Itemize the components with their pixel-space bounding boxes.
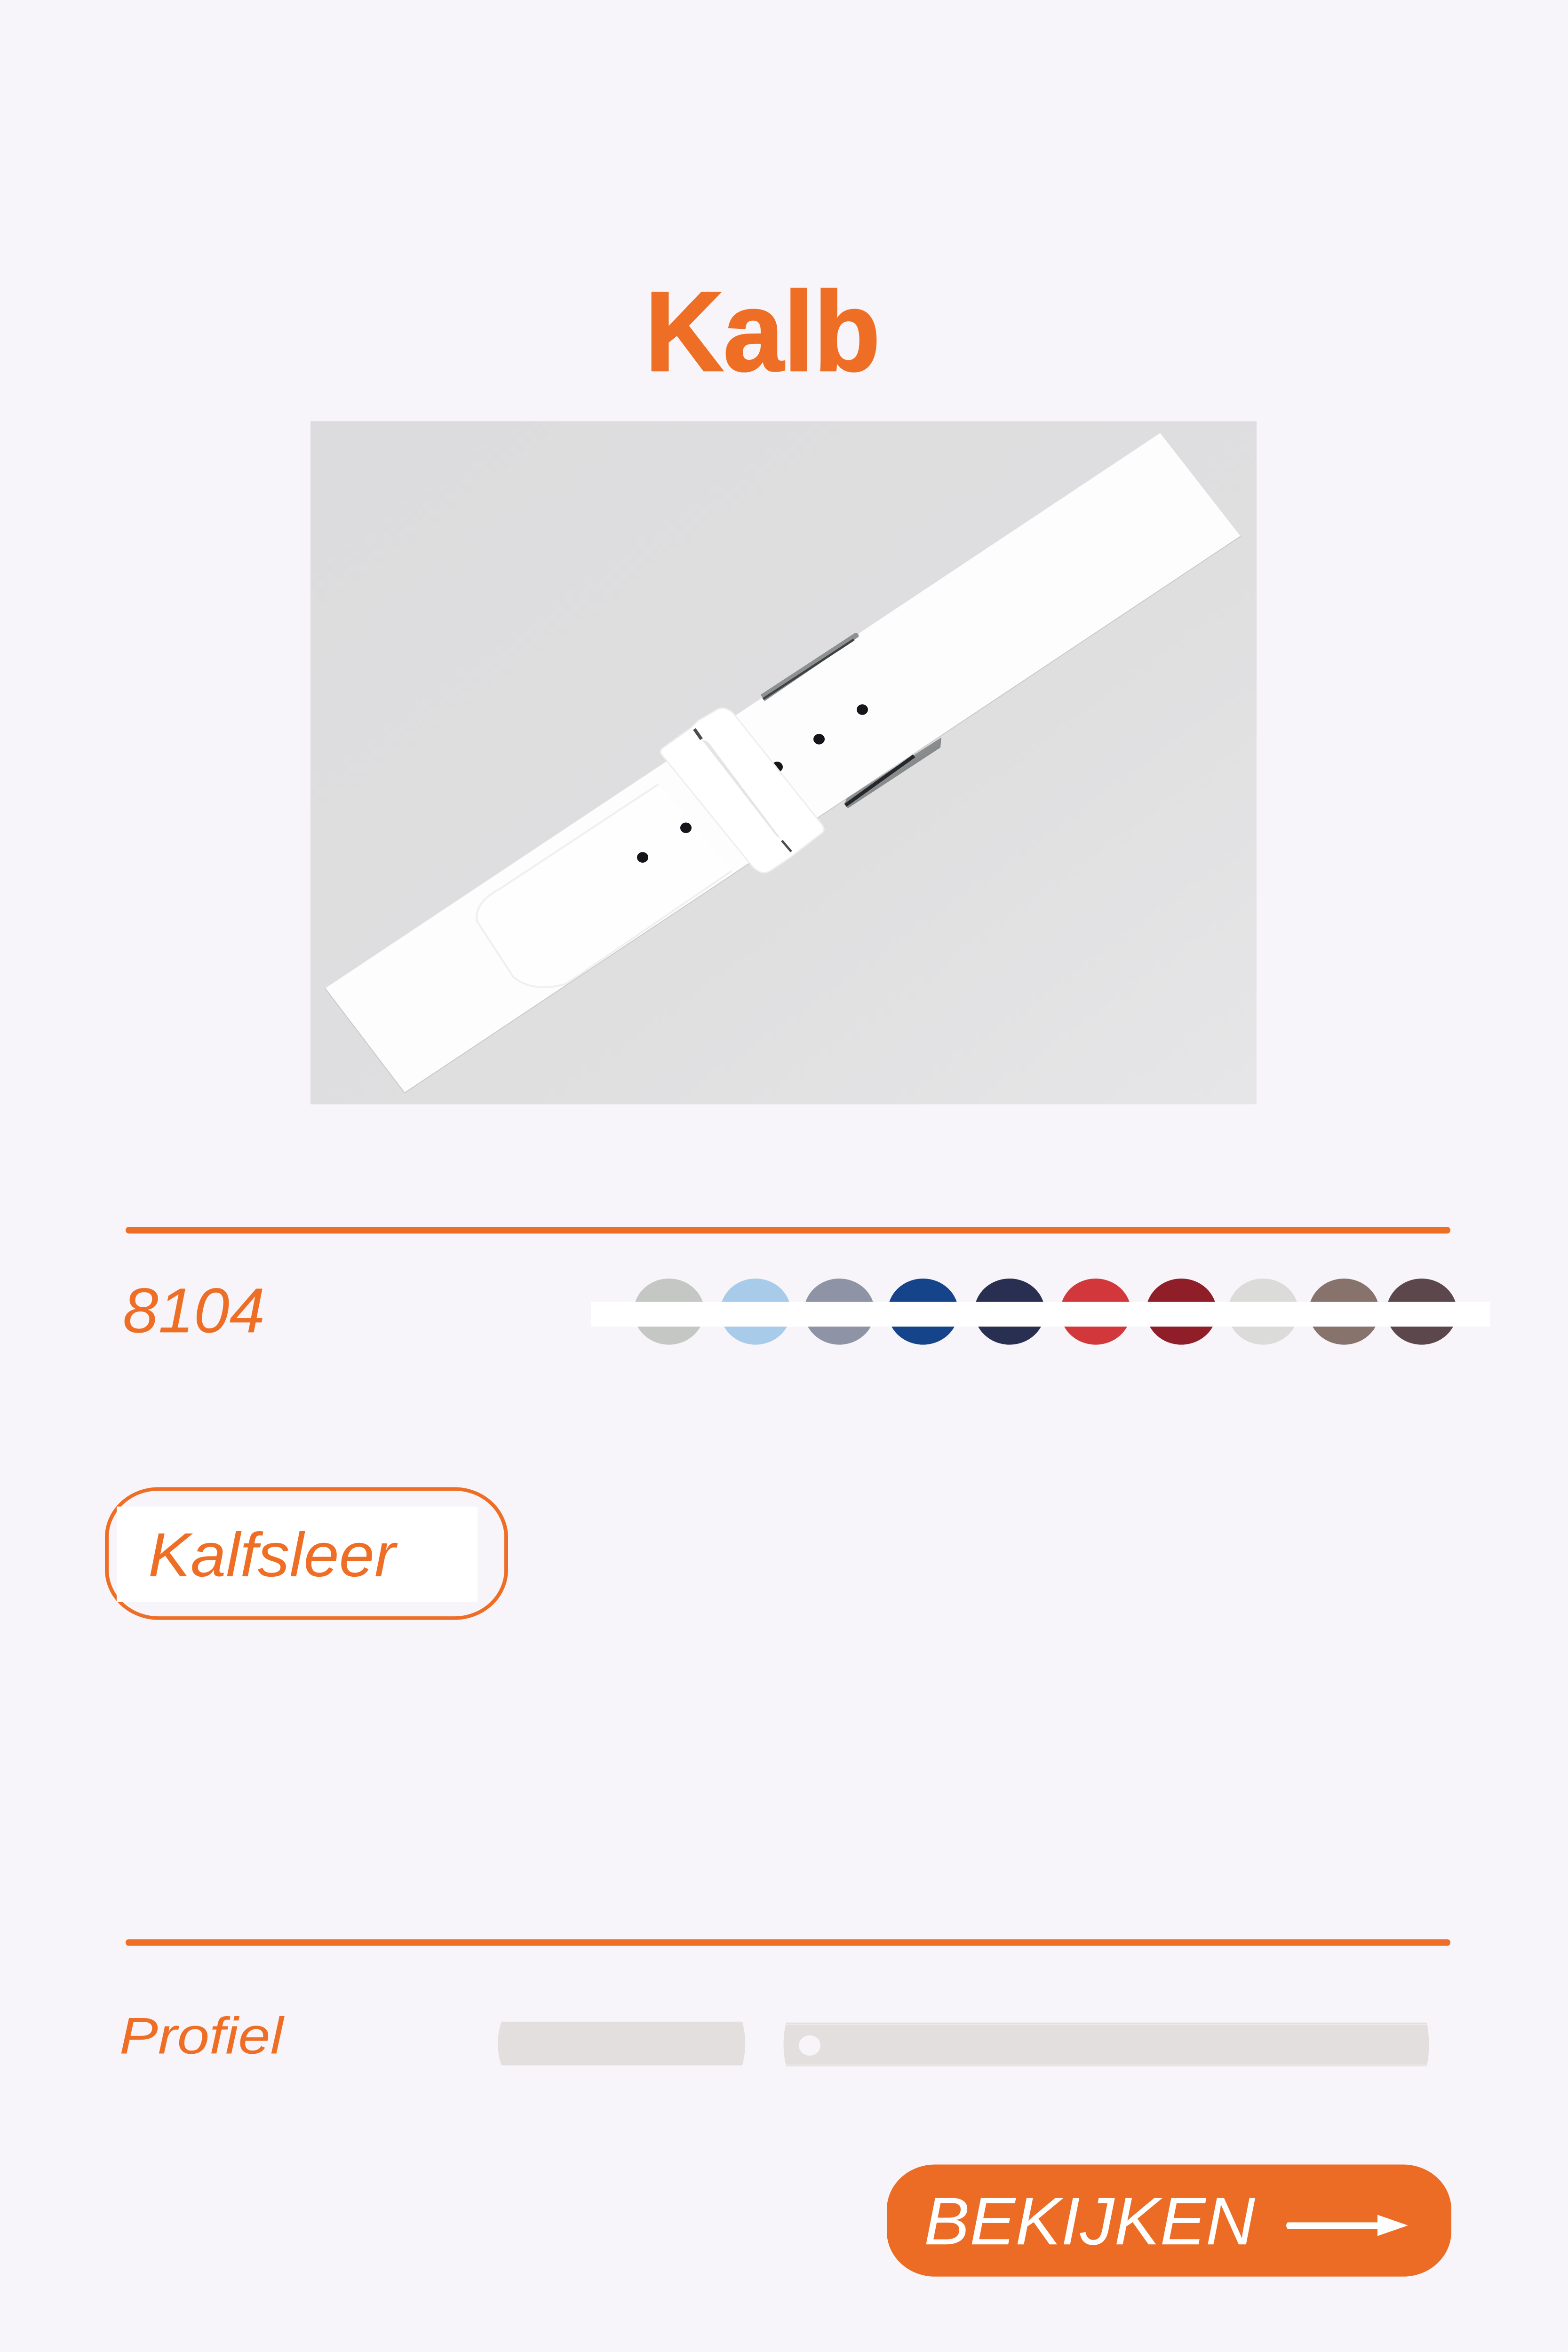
divider bottom — [126, 1939, 1450, 1946]
article number: 8104 — [123, 1275, 265, 1346]
button — [887, 2165, 1451, 2277]
divider top — [126, 1227, 1450, 1233]
strap keeper loops — [661, 708, 824, 873]
strap tip tongue — [477, 784, 732, 987]
title: Kalb — [645, 268, 880, 395]
icon: arrow — [1286, 2215, 1408, 2236]
strap holes — [636, 703, 869, 864]
icon: buckle ends — [761, 633, 941, 809]
profile diagram — [498, 2022, 1429, 2066]
strap body — [325, 433, 1241, 1093]
colour swatches — [591, 1279, 1490, 1345]
material tag — [107, 1489, 506, 1618]
profile label: Profiel — [119, 2007, 285, 2065]
button: BEKIJKEN — [924, 2184, 1256, 2259]
product photo: white calf leather watch strap — [310, 421, 1257, 1104]
material tag: Kalfsleer — [148, 1520, 398, 1589]
